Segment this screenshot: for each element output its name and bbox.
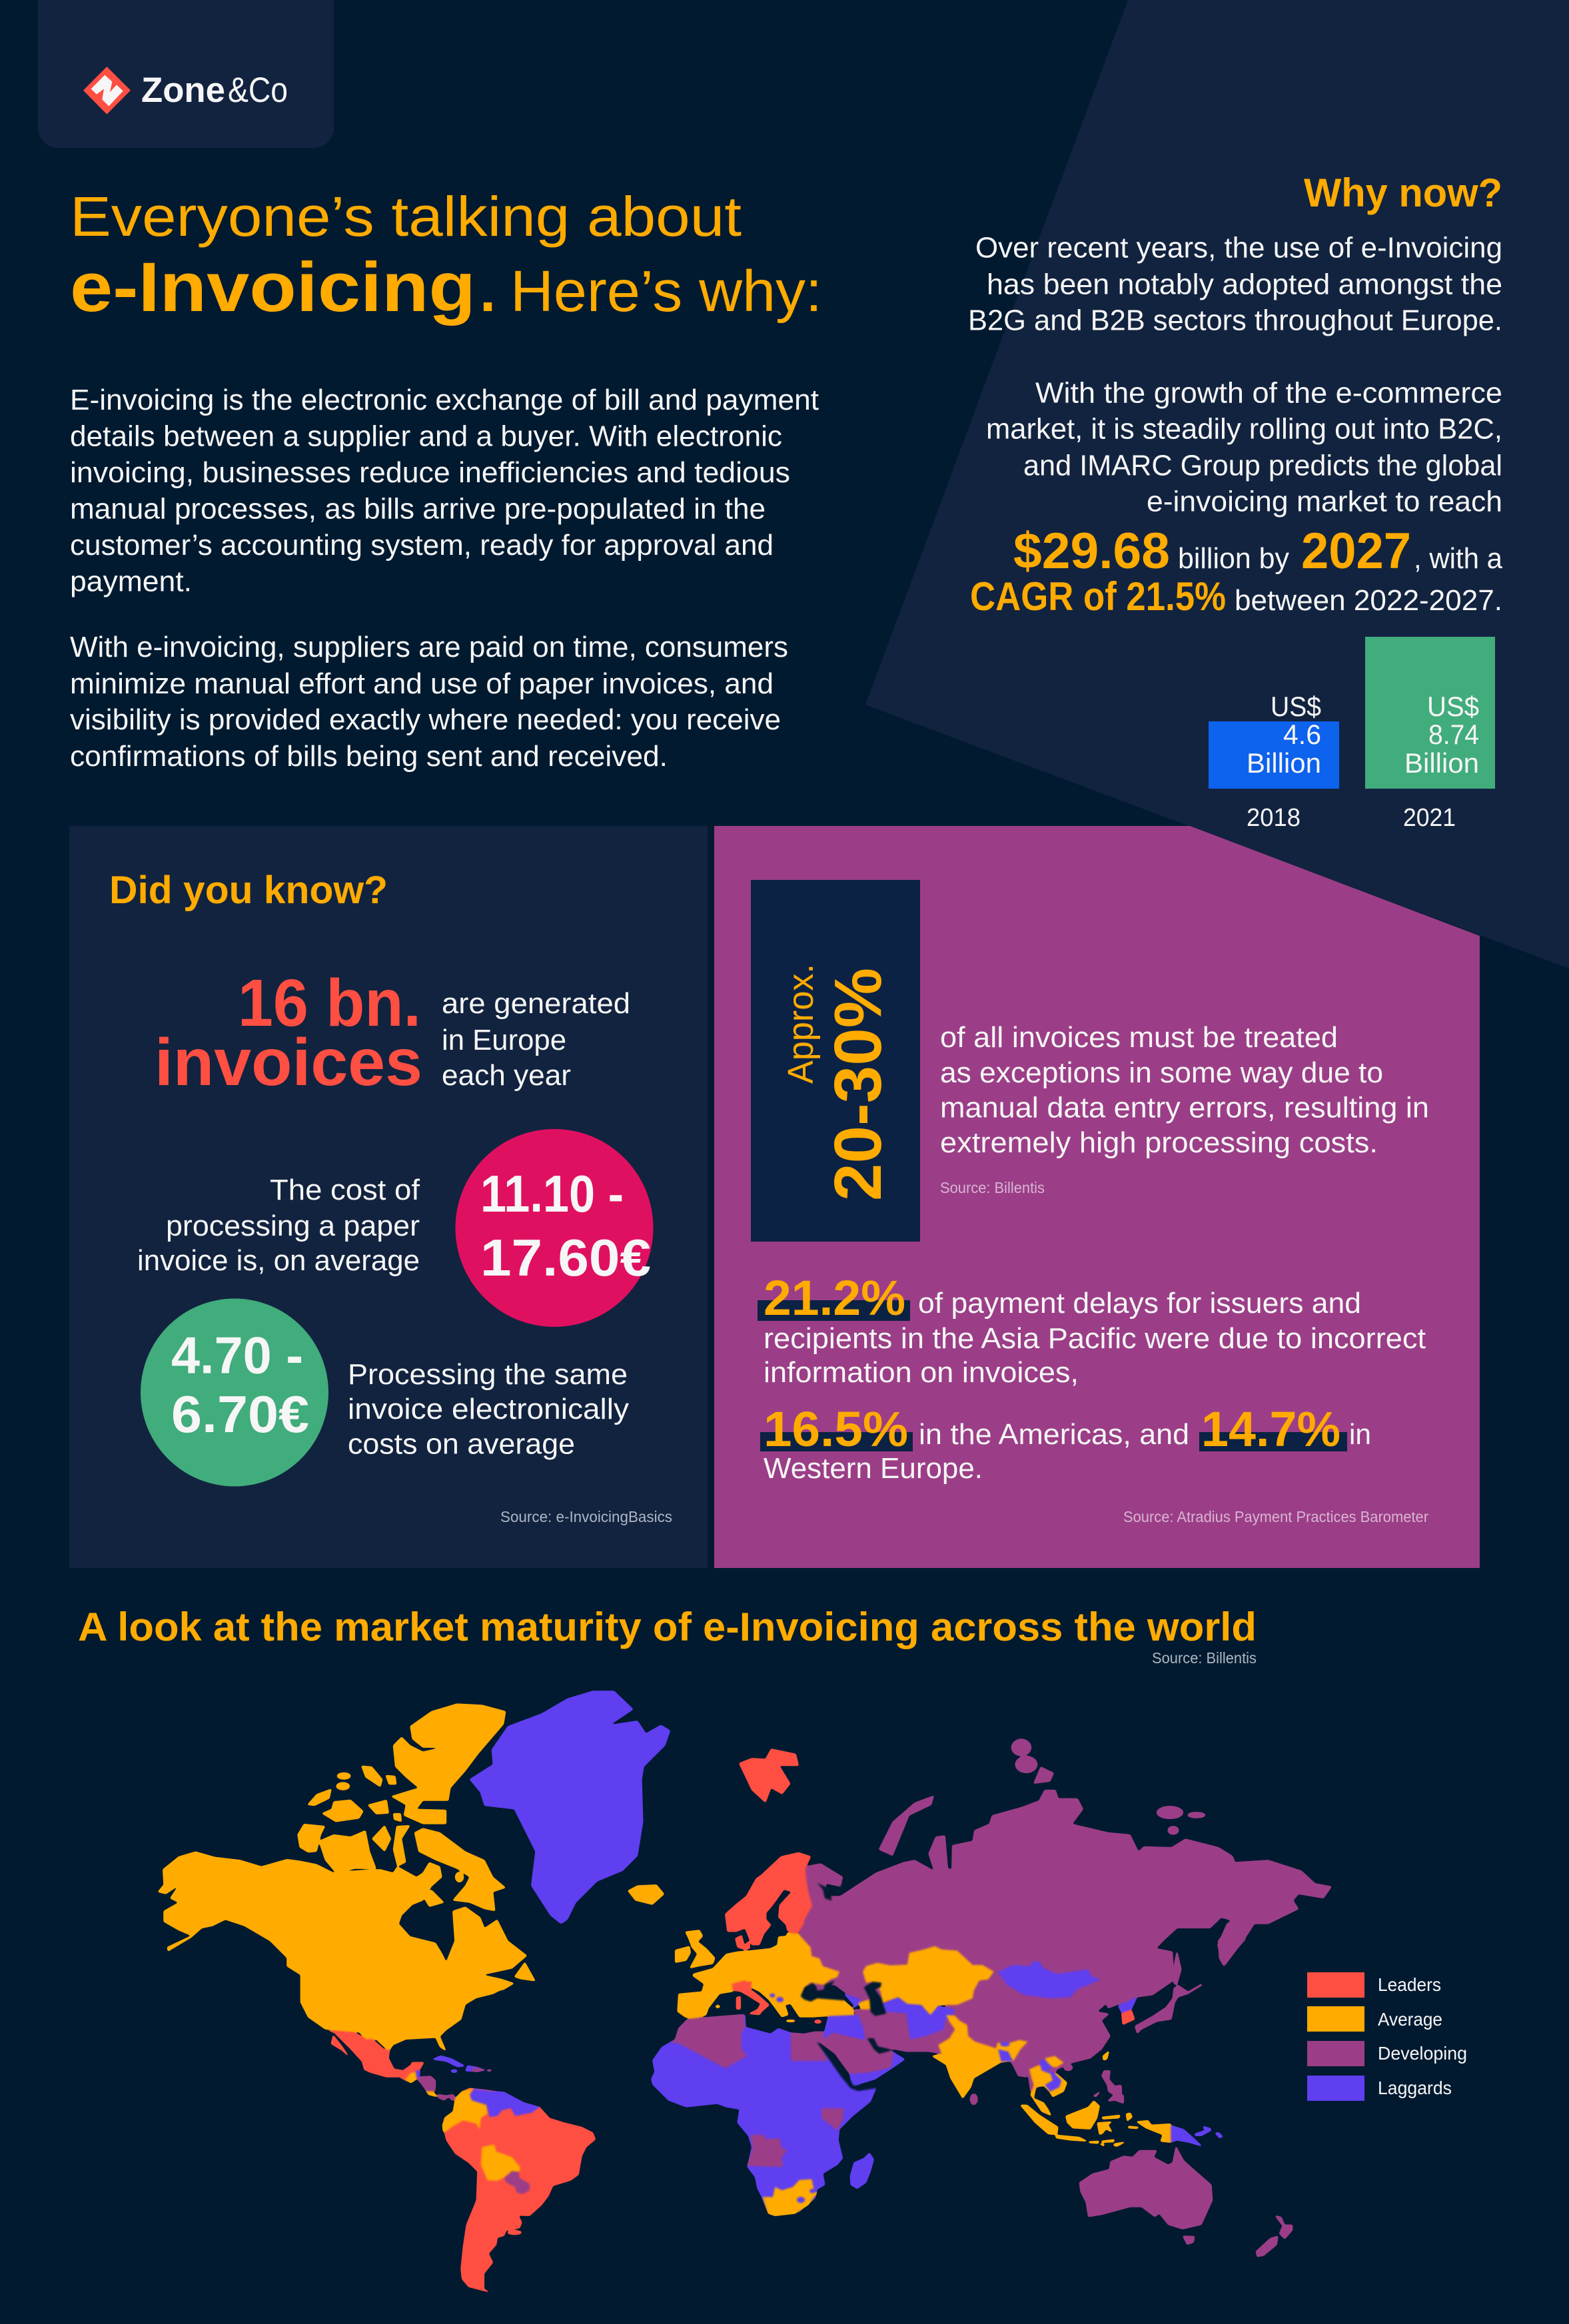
market forecast stat: 2027 xyxy=(1301,523,1411,580)
intro paragraph 2 xyxy=(70,631,788,773)
text: paper invoice cost: invoice is, on average xyxy=(137,1244,420,1277)
legend: average xyxy=(1307,2006,1442,2032)
stat: 16.5% and 14.7% xyxy=(760,1401,1371,1485)
stat circle: paper cost xyxy=(456,1129,653,1327)
stat: 16.5% and 14.7%: in the Americas, and xyxy=(919,1418,1189,1451)
logo wordmark: &Co xyxy=(228,71,288,110)
text block: why now: Over recent years, the use of e-Invoicing xyxy=(975,232,1502,264)
bar chart: market size xyxy=(1209,637,1495,832)
bar 2021: US$ xyxy=(1427,691,1479,722)
intro paragraph 1: payment. xyxy=(70,565,192,598)
stat: 21.2% Asia Pacific: recipients in the Asia Pacific were due to incorrect xyxy=(764,1322,1426,1355)
map: Europe, Middle East and Africa xyxy=(651,1852,995,2216)
text: paper invoice cost: processing a paper xyxy=(166,1210,420,1242)
panel: did you know xyxy=(69,826,708,1568)
source: Source: Billentis xyxy=(940,1179,1045,1196)
heading: did you know: Did you know? xyxy=(109,869,388,912)
stat: 16.5% and 14.7%: in xyxy=(1349,1418,1371,1451)
bar 2021: Billion xyxy=(1404,747,1479,779)
legend: laggards: Laggards xyxy=(1378,2078,1452,2098)
intro paragraph 1: details between a supplier and a buyer. With electronic xyxy=(70,420,782,453)
map: North America and Greenland xyxy=(158,1691,670,2052)
legend: leaders: Leaders xyxy=(1378,1974,1441,1995)
intro paragraph 2: visibility is provided exactly where needed: you receive xyxy=(70,703,781,736)
stat circle: paper cost: 17.60€ xyxy=(480,1228,651,1287)
stat circle: electronic cost xyxy=(141,1299,328,1487)
title xyxy=(70,185,822,326)
stat: 21.2% Asia Pacific xyxy=(758,1270,1426,1389)
text: exceptions: as exceptions in some way due to xyxy=(940,1056,1383,1089)
legend xyxy=(1307,1972,1467,2101)
bar 2018 xyxy=(1209,691,1339,832)
intro paragraph 1: invoicing, businesses reduce inefficiencies and tedious xyxy=(70,456,790,489)
bar 2021 xyxy=(1365,637,1495,832)
text: exceptions: extremely high processing costs. xyxy=(940,1126,1378,1159)
text: exceptions xyxy=(940,1021,1429,1159)
title: e-Invoicing xyxy=(70,248,476,326)
intro paragraph 2: With e-invoicing, suppliers are paid on time, consumers xyxy=(70,631,788,663)
stat: 21.2% Asia Pacific: of payment delays for issuers and xyxy=(918,1287,1361,1320)
logo wordmark xyxy=(141,71,288,110)
map: South and Southeast Asia, Oceania xyxy=(931,1962,1293,2257)
map: Russia and Arctic xyxy=(739,1739,1332,1975)
bar 2018: 4.6 xyxy=(1283,719,1321,750)
title: . xyxy=(480,259,496,324)
text block: why now: With the growth of the e-commerce xyxy=(1035,377,1502,409)
stat circle: electronic cost: 4.70 - xyxy=(171,1326,303,1384)
text block: why now: e-invoicing market to reach xyxy=(1147,485,1502,518)
title: Everyone’s talking about xyxy=(70,185,742,248)
market forecast stat: $29.68 xyxy=(1013,523,1170,580)
heading: why now: Why now? xyxy=(1304,171,1502,215)
bar 2018: US$ xyxy=(1271,691,1321,722)
intro paragraph 1: E-invoicing is the electronic exchange of bill and payment xyxy=(70,384,819,416)
text block: why now: market, it is steadily rolling out into B2C, xyxy=(986,413,1502,445)
legend: laggards xyxy=(1307,2076,1452,2101)
market forecast stat: billion by xyxy=(1178,542,1289,575)
bar 2018: 2018 xyxy=(1247,804,1301,832)
world map xyxy=(158,1691,1332,2293)
title: Here’s why: xyxy=(510,259,822,324)
stat: 16 bn invoices: each year xyxy=(442,1059,571,1092)
text: electronic invoice cost: costs on average xyxy=(348,1428,575,1460)
source: Source: e-InvoicingBasics xyxy=(500,1508,672,1525)
text: exceptions: of all invoices must be treated xyxy=(940,1021,1338,1054)
stat: 16 bn invoices: in Europe xyxy=(442,1024,566,1056)
source: Source: Billentis xyxy=(1152,1649,1257,1667)
text: exceptions: manual data entry errors, resulting in xyxy=(940,1091,1429,1124)
icon: Zone & Co diamond xyxy=(83,67,131,115)
stat: 16 bn invoices: 16 bn. xyxy=(238,966,421,1040)
panel: exceptions and delays xyxy=(714,826,1480,1568)
stat circle: paper cost: 11.10 - xyxy=(480,1164,624,1223)
stat: 16.5% and 14.7%: 16.5% xyxy=(764,1401,908,1457)
background angled panel xyxy=(865,0,1569,968)
intro paragraph 1: manual processes, as bills arrive pre-populated in the xyxy=(70,493,766,525)
market forecast stat: CAGR of 21.5% xyxy=(970,574,1226,619)
legend: developing: Developing xyxy=(1378,2043,1467,2064)
text: electronic invoice cost: Processing the same xyxy=(348,1358,628,1391)
market forecast stat: between 2022-2027. xyxy=(1235,584,1502,617)
callout: approx 20-30%: 20-30% xyxy=(821,968,895,1201)
stat: 16 bn invoices: are generated xyxy=(442,987,630,1020)
market forecast stat xyxy=(970,523,1503,619)
stat: 21.2% Asia Pacific: information on invoices, xyxy=(764,1356,1079,1389)
callout: approx 20-30% xyxy=(751,880,920,1242)
bar 2018: Billion xyxy=(1247,747,1321,779)
map: Central and South America xyxy=(325,2030,596,2293)
text block: why now: has been notably adopted amongst the xyxy=(987,268,1502,301)
text block: why now: B2G and B2B sectors throughout Europe. xyxy=(968,304,1502,337)
text: paper invoice cost xyxy=(137,1174,420,1277)
stat: 16 bn invoices: invoices xyxy=(155,1025,422,1100)
intro paragraph 2: minimize manual effort and use of paper invoices, and xyxy=(70,667,774,700)
legend: average: Average xyxy=(1378,2009,1442,2030)
text block: why now xyxy=(968,232,1502,518)
stat circle: electronic cost: 6.70€ xyxy=(171,1385,309,1443)
logo wordmark: Zone xyxy=(141,71,225,110)
logo xyxy=(38,0,334,148)
text: paper invoice cost: The cost of xyxy=(270,1174,420,1206)
intro paragraph 1 xyxy=(70,384,819,598)
bar 2021: 8.74 xyxy=(1428,719,1479,750)
map: East Asia and Oceania base xyxy=(946,1930,1245,2092)
legend: developing xyxy=(1307,2041,1467,2066)
text: electronic invoice cost: invoice electronically xyxy=(348,1393,629,1425)
legend: leaders xyxy=(1307,1972,1441,1998)
heading: market maturity: A look at the market maturity of e-Invoicing across the world xyxy=(78,1605,1257,1649)
callout: approx 20-30%: Approx. xyxy=(781,964,821,1084)
stat: 16.5% and 14.7%: Western Europe. xyxy=(764,1452,983,1485)
intro paragraph 2: confirmations of bills being sent and received. xyxy=(70,740,668,773)
intro paragraph 1: customer’s accounting system, ready for approval and xyxy=(70,529,774,562)
bar 2021: 2021 xyxy=(1403,804,1456,832)
stat: 16 bn invoices xyxy=(155,966,630,1100)
source: Source: Atradius Payment Practices Barometer xyxy=(1123,1508,1428,1525)
stat: 21.2% Asia Pacific: 21.2% xyxy=(764,1270,905,1326)
stat: 16.5% and 14.7%: 14.7% xyxy=(1201,1401,1340,1457)
market forecast stat: , with a xyxy=(1414,542,1503,575)
text block: why now: and IMARC Group predicts the global xyxy=(1023,449,1502,482)
text: electronic invoice cost xyxy=(348,1358,629,1460)
